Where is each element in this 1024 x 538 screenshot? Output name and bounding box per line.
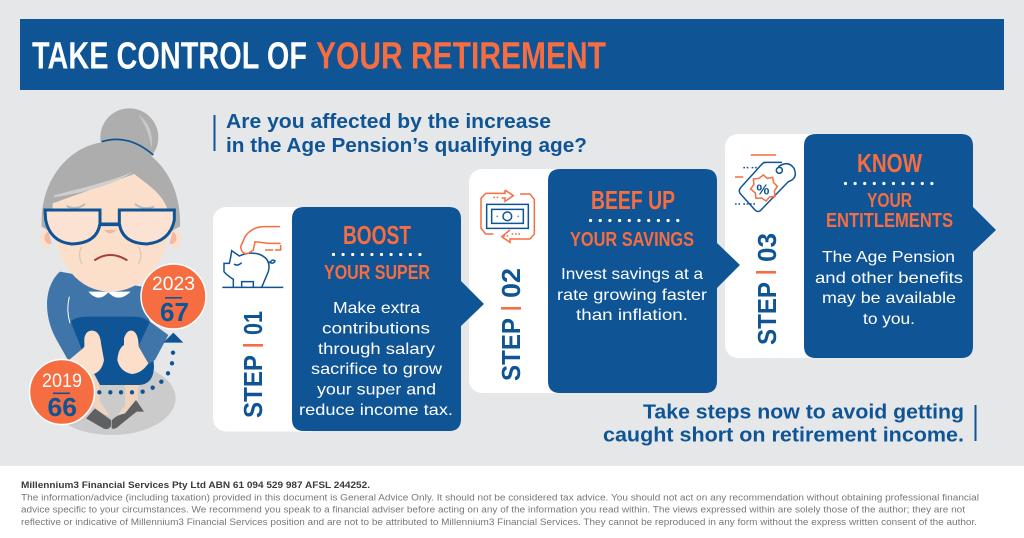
label: step 02: 02 <box>496 268 526 298</box>
closing call to action: Take steps now to avoid getting <box>643 400 964 424</box>
title banner: TAKE CONTROL OF <box>32 36 307 78</box>
panel: step 02 beef up your savings <box>469 169 740 393</box>
card: beef up your savings: YOUR SAVINGS <box>570 229 694 251</box>
disclaimer footer: The information/advice (including taxation) provided in this document is General Advice Only. It should not be considered tax advice. You should not act on any recommendation without obtaining professional financial <box>21 492 979 502</box>
card: boost your super: YOUR SUPER <box>324 262 430 284</box>
badge: 2023 age 67: 67 <box>160 297 189 327</box>
card: boost your super <box>292 207 484 431</box>
title banner <box>20 19 1004 90</box>
intro question <box>214 110 587 157</box>
card: know your entitlements: KNOW <box>857 148 922 178</box>
card: know your entitlements: The Age Pension <box>822 249 955 266</box>
badge: 2019 age 66: 66 <box>48 392 77 422</box>
card: beef up your savings: rate growing faster <box>557 287 708 304</box>
card: know your entitlements <box>804 134 996 358</box>
icon: discount price tag: % <box>756 182 769 198</box>
label: step 01: 01 <box>238 311 268 335</box>
icon: piggy bank <box>222 227 283 287</box>
title banner: YOUR RETIREMENT <box>316 36 606 78</box>
card: beef up your savings: Invest savings at a <box>561 266 703 283</box>
card: know your entitlements: YOUR <box>867 190 912 212</box>
card: boost your super: through salary <box>318 341 435 358</box>
disclaimer footer: advice specific to your circumstances. We recommend you speak to a financial adviser before acting on any of the information you read within. The views expressed within are solely those of the author; they are not <box>21 504 966 514</box>
panel: step 03 know your entitlements <box>725 134 996 358</box>
panel: step 01 boost your super <box>213 207 484 432</box>
disclaimer footer <box>0 466 1024 538</box>
card: beef up your savings: BEEF UP <box>591 185 675 215</box>
label: step 02: STEP <box>496 318 526 381</box>
label: step 01 <box>238 311 268 418</box>
closing call to action: caught short on retirement income. <box>603 424 964 446</box>
badge: 2019 age 66: 2019 <box>42 371 82 392</box>
label: step 02 <box>496 268 526 381</box>
disclaimer footer: reflective or indicative of Millennium3 Financial Services position and are not to be attributed to Millennium3 Financial Services. They cannot be reproduced in any form without the express written consent of the author. <box>21 517 977 527</box>
closing call to action <box>603 400 976 446</box>
card: know your entitlements: to you. <box>863 311 915 328</box>
intro question: Are you affected by the increase <box>226 110 551 133</box>
badge: 2023 age 67 <box>141 264 206 329</box>
card: boost your super: BOOST <box>343 220 411 250</box>
label: step 03 <box>752 233 782 345</box>
intro question: in the Age Pension’s qualifying age? <box>226 134 587 157</box>
card: boost your super: contributions <box>322 320 430 338</box>
card: beef up your savings: than inflation. <box>576 307 688 324</box>
card: boost your super: reduce income tax. <box>299 402 453 419</box>
card: boost your super: sacrifice to grow <box>311 361 443 378</box>
icon: discount price tag <box>735 155 795 211</box>
disclaimer footer: Millennium3 Financial Services Pty Ltd ABN 61 094 529 987 AFSL 244252. <box>21 480 370 490</box>
badge: 2019 age 66 <box>30 360 94 424</box>
badge: 2023 age 67: 2023 <box>152 274 195 295</box>
icon: banknote with arrows <box>481 190 534 242</box>
label: step 03: 03 <box>752 233 782 262</box>
illustration: worried grandmother <box>40 108 183 435</box>
card: boost your super: Make extra <box>333 300 420 317</box>
card: beef up your savings <box>548 169 740 393</box>
card: boost your super: your super and <box>317 382 436 398</box>
card: know your entitlements: may be available <box>822 290 956 307</box>
label: step 01: STEP <box>238 355 268 418</box>
card: know your entitlements: ENTITLEMENTS <box>826 210 953 232</box>
label: step 03: STEP <box>752 282 782 345</box>
card: know your entitlements: and other benefits <box>815 270 963 287</box>
